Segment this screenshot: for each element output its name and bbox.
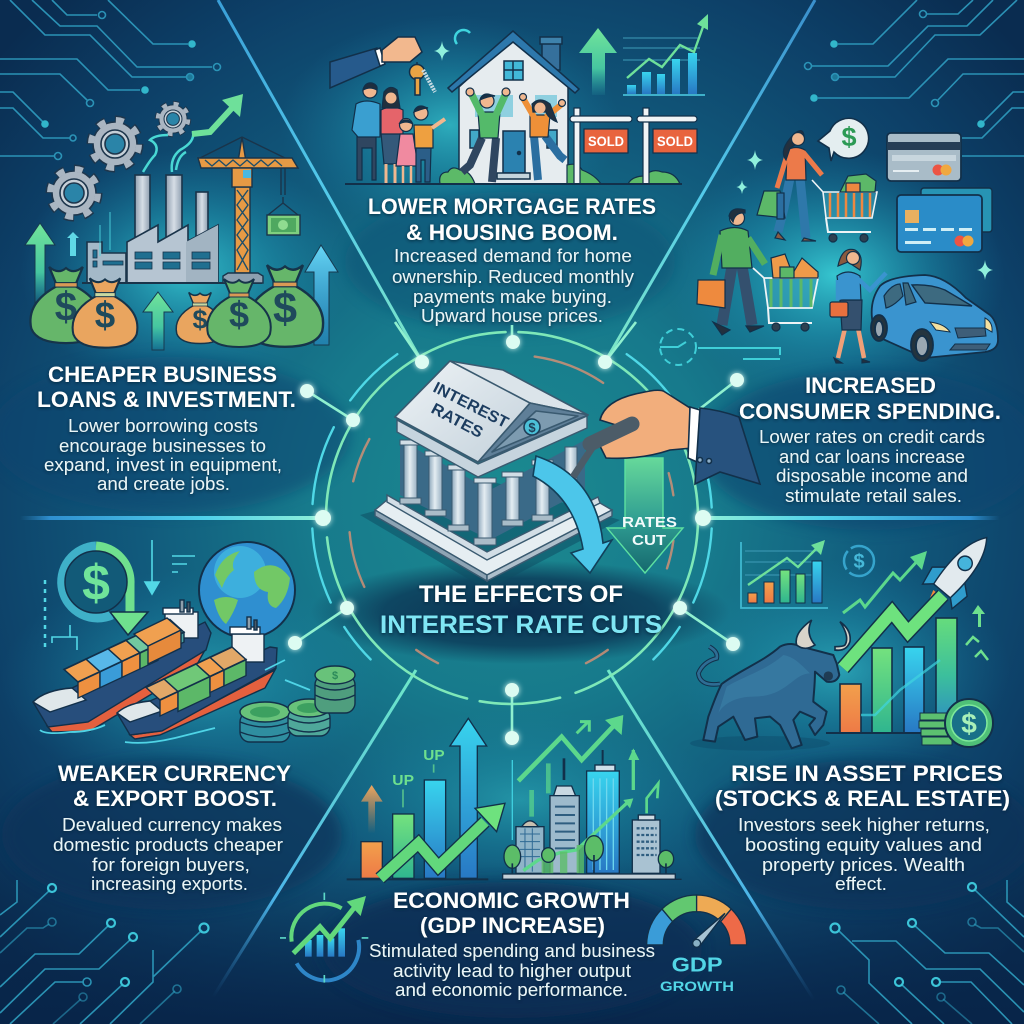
text: cheaper business loans: and create jobs. [97, 474, 230, 494]
chart: thin green trend [843, 551, 927, 613]
icon: smoke and growth arrow [143, 94, 243, 172]
icon: gears [50, 104, 188, 217]
text: increased consumer spending: INCREASED [805, 373, 936, 398]
text: increased consumer spending [739, 373, 1001, 506]
circuit traces: top right [804, 0, 1024, 156]
arrow: curved blue [533, 456, 612, 573]
chart: growth bars and up arrows: UP [423, 748, 445, 764]
text: economic growth: and economic performance. [395, 980, 628, 1000]
waves [40, 660, 310, 743]
text: lower mortgage rates: Increased demand for home [394, 246, 632, 266]
chart: big bars with coins: $ [961, 708, 977, 739]
text: lower mortgage rates: ownership. Reduced monthly [392, 267, 634, 287]
text: cheaper business loans: encourage businesses to [59, 436, 266, 456]
text: rise in asset prices: property prices. Wealth [762, 855, 965, 875]
text: weaker currency: for foreign buyers, [92, 855, 250, 875]
icon: speech bubble with dollar [818, 118, 869, 161]
connector nodes [288, 322, 744, 745]
roof label: INTEREST [430, 379, 511, 432]
bank shadow [360, 480, 620, 590]
icon: family [352, 83, 445, 184]
icon: green arrow up [579, 28, 617, 95]
panel: housing illustration [330, 14, 708, 184]
ground line [345, 183, 682, 185]
chart: rising bars [623, 14, 708, 95]
title: INTEREST RATE CUTS [380, 611, 662, 639]
icon: speech bubble with dollar: $ [841, 122, 857, 152]
chart: small bar chart [741, 540, 828, 608]
icon: credit card grey [887, 133, 961, 181]
icon: hand on lever [573, 390, 760, 484]
gauge label [660, 955, 734, 994]
chart: growth bars and up arrows: UP [392, 773, 414, 789]
chart: big bars with coins [826, 595, 993, 747]
text: weaker currency: Devalued currency makes [62, 815, 282, 835]
text: rise in asset prices: RISE IN ASSET PRICES [731, 761, 1003, 786]
text: weaker currency: domestic products cheaper [53, 835, 283, 855]
icon: dollar cycle: $ [853, 551, 865, 573]
arrow: rates cut: CUT [632, 532, 666, 549]
text: rise in asset prices: effect. [835, 874, 887, 894]
text: rise in asset prices: (STOCKS & REAL ESTATE) [715, 786, 1010, 811]
panel: asset prices illustration [690, 523, 1004, 751]
text: economic growth: (GDP INCREASE) [420, 913, 605, 938]
icon: crane [198, 137, 300, 283]
icon: hand with key [330, 37, 435, 95]
icon: ship one [33, 600, 211, 732]
icon: rocket [906, 523, 1004, 628]
panel: consumer spending illustration [660, 118, 998, 365]
icon: up arrows [25, 212, 338, 350]
icon: house [448, 31, 579, 184]
icon: credit card blue [897, 188, 992, 252]
icon: sold signs: SOLD [588, 134, 624, 149]
icon: money bags: $ [273, 285, 297, 333]
icon: money bags: $ [229, 294, 249, 335]
text: rise in asset prices [715, 761, 1010, 894]
icon: coin stacks [240, 666, 355, 742]
circuit traces: top left [0, 0, 220, 160]
icon: factory [82, 175, 262, 283]
icon: falling dollar [62, 546, 148, 635]
text: increased consumer spending: stimulate retail sales. [785, 486, 962, 506]
text: cheaper business loans: LOANS & INVESTMENT. [37, 387, 296, 412]
circuit traces: bottom left [0, 880, 208, 1024]
icon: celebrating couple [462, 88, 566, 182]
panel: export illustration [33, 540, 355, 743]
bank roof: $ [528, 420, 536, 435]
text: increased consumer spending: CONSUMER SPENDING. [739, 399, 1001, 424]
text: increased consumer spending: disposable income and [776, 466, 968, 486]
circuit traces: bottom right [830, 880, 1024, 1024]
text: weaker currency [53, 761, 291, 894]
central bank building [360, 361, 620, 590]
chart: growth bars and up arrows [347, 718, 505, 879]
icon: coin stacks: $ [332, 670, 338, 682]
title [380, 581, 662, 639]
icon: ship two [117, 617, 277, 739]
icon: money bags [30, 265, 323, 348]
central dark halo behind title [310, 560, 730, 664]
shopper: man with cart [697, 209, 818, 335]
text: weaker currency: WEAKER CURRENCY [58, 761, 291, 786]
shopper: woman with cart [757, 131, 877, 242]
text: lower mortgage rates: LOWER MORTGAGE RATES [368, 194, 656, 219]
icon: falling dollar: $ [82, 555, 110, 611]
text: cheaper business loans: CHEAPER BUSINESS [48, 362, 277, 387]
text: lower mortgage rates: payments make buying. [413, 287, 612, 307]
icon: money bags: $ [55, 284, 77, 330]
icon: bushes [440, 164, 680, 184]
gauge label: GROWTH [660, 978, 734, 994]
icon: city skyline [502, 715, 682, 879]
bank entablature [397, 416, 587, 477]
roof label: RATES [428, 401, 486, 442]
central rings [312, 332, 712, 704]
icon: GDP gauge [647, 895, 747, 947]
decorative down arrow [45, 540, 195, 650]
text: economic growth: activity lead to higher output [393, 961, 631, 981]
panel: business loans illustration [25, 94, 338, 350]
text: increased consumer spending: Lower rates on credit cards [759, 427, 985, 447]
icon: car [871, 275, 998, 361]
bank columns [400, 440, 577, 545]
icon: bull [690, 620, 850, 751]
shopper: woman beside car [830, 249, 886, 363]
icon: sold signs: SOLD [657, 134, 693, 149]
icon: sparkles [736, 150, 993, 280]
icon: money bags: $ [95, 294, 115, 335]
title: THE EFFECTS OF [419, 581, 623, 608]
text: weaker currency: increasing exports. [91, 874, 248, 894]
arrow: rates cut: RATES [622, 514, 677, 531]
icon: sparkle and refresh [434, 30, 470, 61]
text: cheaper business loans: expand, invest in equipment, [44, 455, 282, 475]
arrow: rates cut [607, 458, 683, 573]
text: economic growth [369, 888, 655, 1000]
icon: globe [199, 542, 295, 638]
bank inner wall [400, 440, 585, 540]
icon: crosshair [660, 329, 780, 365]
text: rise in asset prices: Investors seek higher returns, [738, 815, 990, 835]
text: cheaper business loans: Lower borrowing costs [68, 416, 258, 436]
text: lower mortgage rates [368, 194, 656, 326]
icon: sold signs [570, 108, 697, 184]
icon: growth circle [280, 893, 368, 983]
gauge label: GDP [672, 955, 723, 977]
text: rise in asset prices: boosting equity values and [745, 835, 982, 855]
text: lower mortgage rates: Upward house prices. [421, 306, 603, 326]
bank steps [375, 495, 612, 581]
text: increased consumer spending: and car loans increase [779, 447, 965, 467]
text: economic growth: Stimulated spending and business [369, 941, 655, 961]
icon: dollar cycle [844, 546, 874, 576]
text: lower mortgage rates: & HOUSING BOOM. [406, 220, 618, 245]
text: weaker currency: & EXPORT BOOST. [73, 786, 277, 811]
text: cheaper business loans [37, 362, 296, 494]
icon: money bags: $ [192, 304, 208, 334]
bank roof [395, 361, 588, 462]
panel: GDP illustration [280, 715, 747, 994]
text: economic growth: ECONOMIC GROWTH [393, 888, 630, 913]
